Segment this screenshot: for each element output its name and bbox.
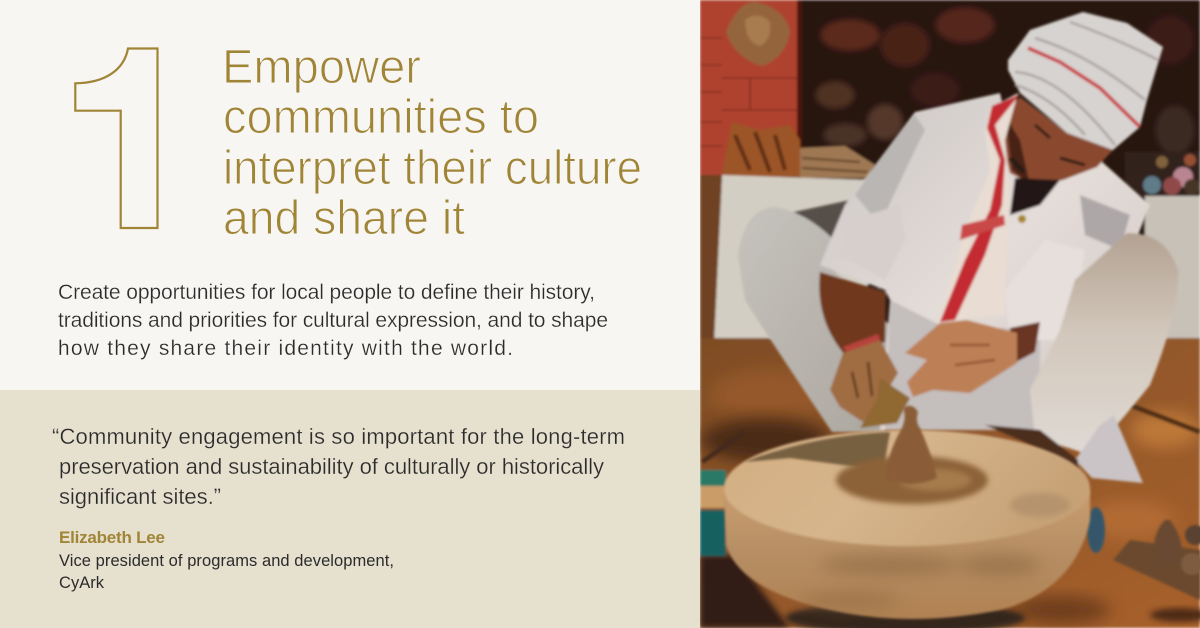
attribution name: Elizabeth Lee (59, 528, 165, 547)
heading: communities to (223, 91, 539, 144)
stacked tiles (800, 146, 875, 178)
body text (58, 281, 608, 360)
photo: potter at wheel (700, 0, 1200, 628)
quote (52, 424, 625, 509)
cloth left (712, 172, 870, 340)
attribution role: Vice president of programs and development, (59, 552, 394, 570)
right forearm (1008, 320, 1042, 362)
torso and shirt (820, 93, 1150, 430)
left hand (830, 340, 898, 422)
attribution role: CyArk (59, 574, 105, 592)
ground (700, 338, 1200, 628)
clay swirl (836, 456, 988, 504)
numeral 1 outline (75, 48, 158, 228)
pottery wheel (724, 406, 1090, 628)
wheel base (785, 602, 1025, 628)
tools and teal box (700, 444, 728, 464)
clay lump (860, 378, 910, 428)
wheel top (724, 430, 1090, 546)
wheel shadow (745, 432, 890, 470)
body text: Create opportunities for local people to define their history, (58, 281, 595, 304)
potter figure (738, 12, 1178, 553)
dark foot shadow and blue shoe (985, 425, 1078, 470)
trouser cuff (1075, 415, 1143, 483)
face (1002, 97, 1113, 185)
wheel side (724, 490, 1090, 619)
quote: significant sites.” (59, 484, 221, 509)
turban red stripe (1028, 48, 1140, 127)
body text: how they share their identity with the world. (58, 337, 513, 360)
left trouser leg (738, 207, 905, 432)
body text: traditions and priorities for cultural expression, and to shape (58, 309, 608, 332)
right hand (905, 320, 1017, 397)
relief: carved tile (722, 122, 800, 177)
relief: ganesha (726, 2, 790, 66)
panel: intro background (0, 0, 700, 390)
heading (222, 41, 642, 245)
shadow under left knee (793, 199, 880, 290)
cloth right (1145, 196, 1200, 351)
right trouser leg (1030, 233, 1178, 455)
brick wall (700, 0, 800, 176)
turban (1008, 12, 1163, 150)
heading: interpret their culture (223, 142, 642, 195)
panel: quote background (0, 390, 700, 628)
photo background: workshop (700, 0, 1200, 628)
left forearm (819, 272, 886, 355)
heading: Empower (222, 41, 421, 94)
attribution role (59, 552, 394, 592)
necklace pendant (1018, 215, 1026, 223)
quote: “Community engagement is so important for the long-term (52, 424, 625, 449)
pots right (1125, 152, 1200, 197)
clay pot on wheel (885, 406, 937, 484)
scarf (963, 92, 1020, 314)
tray with small pots (1113, 520, 1200, 600)
quote: preservation and sustainability of culturally or historically (59, 454, 604, 479)
heading: and share it (223, 192, 465, 245)
quote attribution (59, 528, 394, 592)
